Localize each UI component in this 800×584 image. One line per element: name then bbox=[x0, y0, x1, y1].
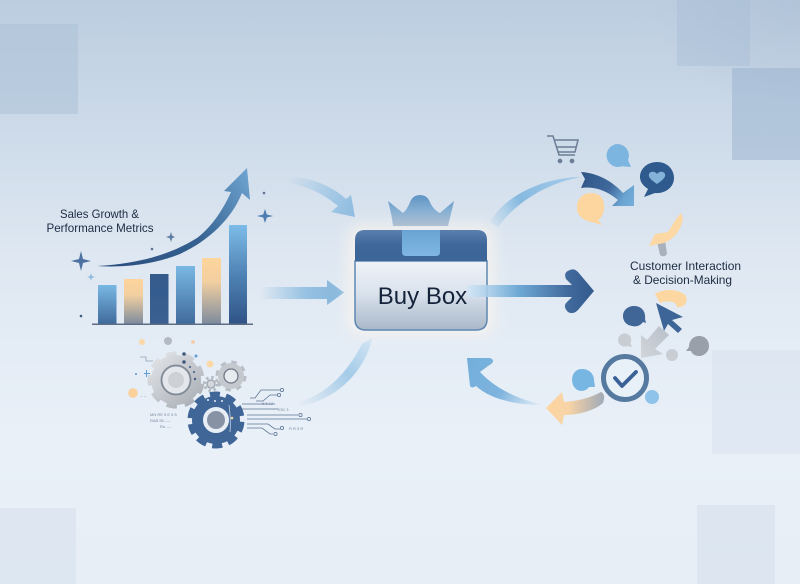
tiny labels: R R 5 R bbox=[289, 426, 303, 431]
orange blob bbox=[655, 290, 687, 307]
label: sales growth: Sales Growth & bbox=[60, 207, 139, 221]
label: sales growth bbox=[46, 207, 154, 235]
arrow: curved dark blue bbox=[581, 172, 634, 206]
icon: orange speech bubble bbox=[577, 193, 604, 225]
panel: gears bbox=[128, 337, 311, 446]
arrow: buy box to customer bbox=[467, 269, 594, 313]
tiny labels: -- -- bbox=[140, 393, 147, 398]
circuit lines bbox=[140, 357, 311, 436]
label: customer interaction: Customer Interaction bbox=[630, 259, 741, 273]
icon: check ring bbox=[604, 356, 646, 400]
icon: crown bbox=[388, 195, 454, 226]
buy box label: Buy Box bbox=[378, 283, 467, 310]
arrow: arc to cart side bbox=[490, 177, 582, 227]
glow bbox=[347, 224, 495, 336]
arrow: bottom left curved to buy box bbox=[298, 338, 372, 407]
arrow: top left curved to buy box bbox=[288, 177, 355, 217]
box tab bbox=[402, 230, 440, 256]
box header bbox=[355, 230, 487, 261]
label: customer interaction bbox=[630, 259, 741, 287]
arrow: middle right to buy box bbox=[260, 280, 344, 305]
icon: small grey gear bbox=[204, 378, 218, 390]
arrow: grey down-left bbox=[641, 326, 669, 358]
bar chart bbox=[92, 225, 253, 325]
label: sales growth: Performance Metrics bbox=[46, 221, 154, 235]
icon: cursor bbox=[656, 303, 683, 333]
icon: hand bbox=[649, 213, 683, 256]
arrow: growth curve bbox=[97, 168, 250, 266]
arrow: orange to grey bbox=[546, 392, 604, 425]
tiny labels: E51 3 bbox=[278, 407, 289, 412]
tiny labels: RAB 55 ---- bbox=[150, 418, 171, 423]
icon: shopping cart bbox=[547, 136, 578, 163]
tiny labels: 5 5 12 bbox=[262, 401, 274, 406]
panel: buy box bbox=[347, 195, 495, 336]
icon: bubbles around check bbox=[572, 369, 595, 391]
panel: customer interaction bbox=[546, 136, 741, 425]
icon: large grey gear bbox=[149, 353, 203, 407]
icon: light blue speech bubble bbox=[607, 144, 631, 167]
icon: medium grey gear bbox=[218, 363, 244, 389]
box body bbox=[355, 261, 487, 330]
grey bubbles bbox=[618, 333, 709, 361]
icons: sparkles bbox=[71, 192, 273, 317]
arrow: return curve to buy box bbox=[467, 358, 543, 405]
icon: heart speech bubble bbox=[640, 162, 674, 197]
icon: dark speech bubble bbox=[623, 306, 646, 326]
tiny labels bbox=[140, 393, 303, 431]
panel: sales growth and performance metrics bbox=[46, 168, 273, 325]
tiny labels: Ru ---- bbox=[160, 424, 172, 429]
icon: blue gear bbox=[190, 394, 242, 446]
label: customer interaction: & Decision-Making bbox=[633, 273, 732, 287]
tiny labels: MN RE 5 E 5 5 bbox=[150, 412, 177, 417]
decorative dots bbox=[128, 337, 214, 398]
